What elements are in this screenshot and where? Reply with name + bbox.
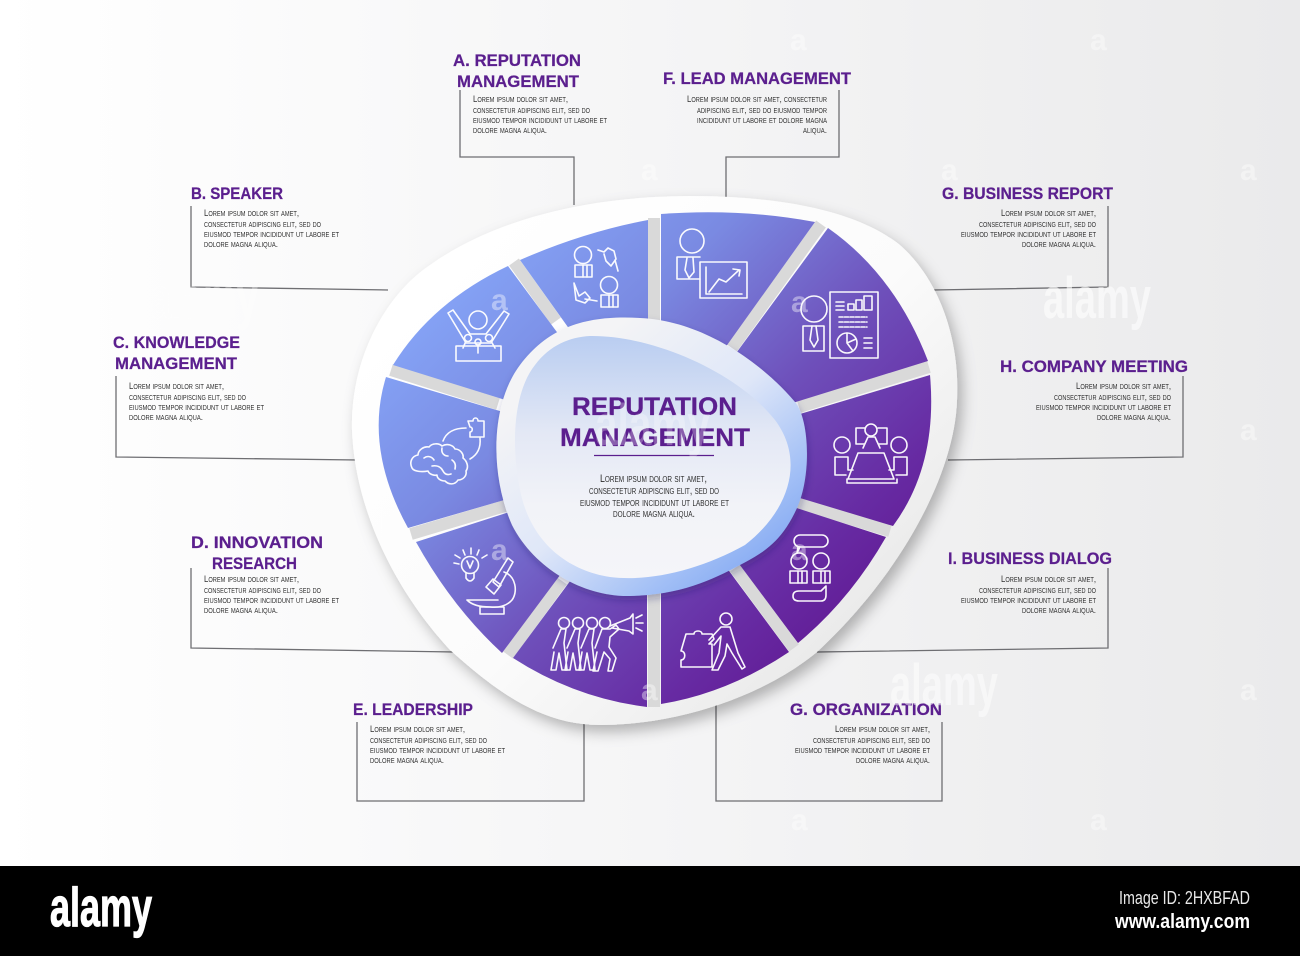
section: I: eiusmod tempor incididunt ut labore et (961, 595, 1097, 606)
stock watermarks: alamy (890, 653, 998, 718)
section: G organization: consectetur adipiscing elit, sed do (813, 735, 930, 746)
section: G business report: Lorem ipsum dolor sit amet, (1001, 208, 1096, 219)
section: B: eiusmod tempor incididunt ut labore et (204, 229, 340, 240)
section: I (948, 549, 1112, 616)
section: B: Lorem ipsum dolor sit amet, (204, 208, 299, 219)
stock watermarks: alamy (150, 266, 258, 331)
center title: REPUTATION (572, 393, 737, 421)
section: G organization: G. ORGANIZATION (790, 700, 942, 719)
section: D: D. INNOVATION (191, 533, 323, 552)
section: D: consectetur adipiscing elit, sed do (204, 585, 321, 596)
center title (560, 393, 750, 456)
stock watermarks: alamy (1043, 266, 1151, 331)
section: E: E. LEADERSHIP (353, 700, 473, 719)
section: C: consectetur adipiscing elit, sed do (129, 392, 246, 403)
section: A: eiusmod tempor incididunt ut labore et (473, 115, 608, 126)
section: G organization: eiusmod tempor incididunt ut labore et (795, 745, 931, 756)
section: I: Lorem ipsum dolor sit amet, (1001, 574, 1096, 585)
section: F (663, 69, 852, 136)
stock watermarks: a (641, 674, 658, 707)
outer white blob (352, 196, 957, 725)
section: G business report (942, 184, 1114, 250)
section: D: RESEARCH (212, 554, 297, 573)
stock watermarks: a (790, 24, 807, 57)
section: F: F. LEAD MANAGEMENT (663, 69, 852, 88)
stock watermarks: a (941, 154, 958, 187)
section: F: adipiscing elit, sed do eiusmod tempor (697, 105, 827, 116)
image id: Image ID: 2HXBFAD (1119, 888, 1250, 908)
section: A: dolore magna aliqua. (473, 125, 547, 136)
icon: company meeting (834, 424, 907, 483)
section: C: MANAGEMENT (115, 354, 238, 373)
section: H (1000, 357, 1188, 423)
icon: team with megaphone (551, 614, 643, 671)
section: D: dolore magna aliqua. (204, 605, 278, 616)
footer logo: alamy (50, 876, 152, 938)
icon: brain and puzzle (411, 418, 484, 484)
section: A (453, 51, 608, 136)
section: C: Lorem ipsum dolor sit amet, (129, 381, 224, 392)
section: G organization: Lorem ipsum dolor sit amet, (835, 724, 930, 735)
section: H: eiusmod tempor incididunt ut labore et (1036, 402, 1172, 413)
center text block: Lorem ipsum dolor sit amet, (600, 473, 707, 485)
section: F: incididunt ut labore et dolore magna (697, 115, 827, 126)
stock watermarks: a (1090, 24, 1107, 57)
stock watermarks: a (1240, 154, 1257, 187)
icon: business report (801, 292, 878, 358)
section: B: B. SPEAKER (191, 184, 283, 203)
section: E: dolore magna aliqua. (370, 755, 444, 766)
section: E (353, 700, 506, 766)
ring segments (379, 212, 931, 707)
section: F: aliqua. (803, 125, 827, 136)
stock watermarks: a (1240, 414, 1257, 447)
stock watermarks: a (491, 534, 508, 567)
icon: winner with microphones (448, 310, 509, 361)
center text block: consectetur adipiscing elit, sed do (589, 485, 719, 497)
stock watermarks: a (1090, 804, 1107, 837)
center title: MANAGEMENT (560, 424, 750, 452)
stock watermarks: a (1240, 674, 1257, 707)
section: G organization (790, 700, 942, 766)
section: A: Lorem ipsum dolor sit amet, (473, 94, 568, 105)
section: B (191, 184, 340, 250)
section: G organization: dolore magna aliqua. (856, 755, 930, 766)
stock watermarks (150, 24, 1257, 837)
icon: two people signing (574, 246, 618, 307)
section: H: consectetur adipiscing elit, sed do (1054, 392, 1171, 403)
center blob core (515, 336, 791, 578)
section: C: eiusmod tempor incididunt ut labore et (129, 402, 265, 413)
section: H: dolore magna aliqua. (1097, 412, 1171, 423)
section: F: Lorem ipsum dolor sit amet, consectetur (687, 94, 827, 105)
stock watermarks: a (791, 804, 808, 837)
stock watermarks: a (791, 286, 808, 319)
section: I: consectetur adipiscing elit, sed do (979, 585, 1096, 596)
website: www.alamy.com (1114, 911, 1250, 933)
icon: business dialog (790, 535, 830, 601)
section: I: dolore magna aliqua. (1022, 605, 1096, 616)
section: G business report: consectetur adipiscing elit, sed do (979, 219, 1096, 230)
footer bar (0, 866, 1300, 956)
connector lines (116, 90, 1183, 801)
center blob rim (496, 318, 807, 596)
section: B: dolore magna aliqua. (204, 239, 278, 250)
icon: light bulb and microscope (454, 548, 515, 614)
section: D: eiusmod tempor incididunt ut labore et (204, 595, 340, 606)
section: B: consectetur adipiscing elit, sed do (204, 219, 321, 230)
section: C: dolore magna aliqua. (129, 412, 203, 423)
stock watermarks: a (641, 154, 658, 187)
center text block (580, 473, 729, 520)
section: A: MANAGEMENT (457, 72, 580, 91)
section: A: consectetur adipiscing elit, sed do (473, 105, 590, 116)
section: H: H. COMPANY MEETING (1000, 357, 1188, 376)
stock watermarks: a (791, 534, 808, 567)
stock watermarks: a (491, 284, 508, 317)
icon: presenter with chart (677, 229, 747, 298)
stock watermarks: alamy (595, 393, 710, 458)
section: C: C. KNOWLEDGE (113, 333, 240, 352)
section: E: Lorem ipsum dolor sit amet, (370, 724, 465, 735)
section: E: consectetur adipiscing elit, sed do (370, 735, 487, 746)
section: D (191, 533, 340, 616)
icon: person pushing puzzle (681, 613, 745, 670)
center text block: dolore magna aliqua. (613, 508, 695, 520)
section: D: Lorem ipsum dolor sit amet, (204, 574, 299, 585)
segment separators (391, 218, 929, 707)
section: G business report: dolore magna aliqua. (1022, 239, 1096, 250)
section: E: eiusmod tempor incididunt ut labore et (370, 745, 506, 756)
section: C (113, 333, 265, 423)
section: A: A. REPUTATION (453, 51, 581, 70)
section: G business report: eiusmod tempor incididunt ut labore et (961, 229, 1097, 240)
section: I: I. BUSINESS DIALOG (948, 549, 1112, 568)
section: G business report: G. BUSINESS REPORT (942, 184, 1114, 203)
section: H: Lorem ipsum dolor sit amet, (1076, 381, 1171, 392)
center text block: eiusmod tempor incididunt ut labore et (580, 497, 729, 509)
